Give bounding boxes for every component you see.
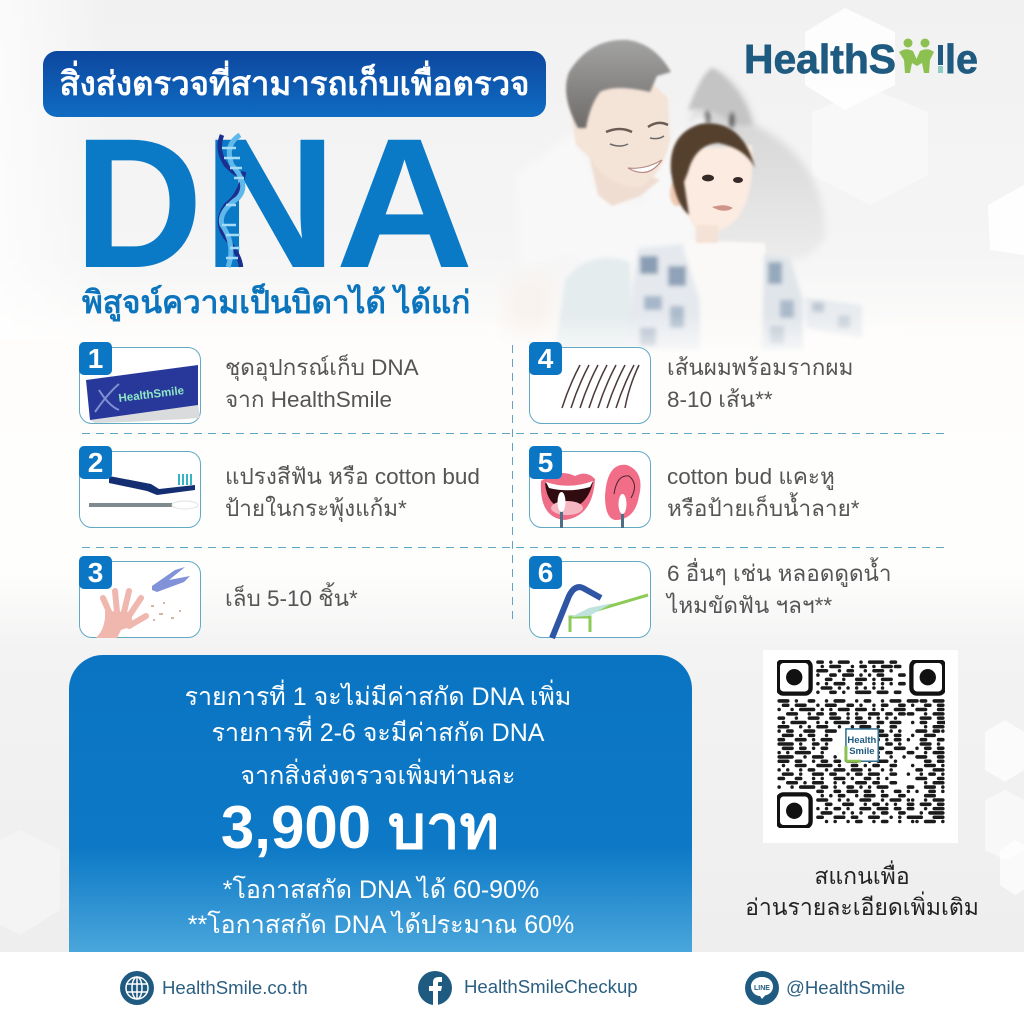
item 4 text: เส้นผมพร้อมรากผม — [667, 355, 853, 380]
item 5 text: cotton bud แคะหู — [667, 464, 835, 489]
icon: facebook — [418, 971, 452, 1005]
number badge 2: 2 — [88, 447, 103, 478]
child shirt — [675, 240, 775, 350]
item 2 text: ป้ายในกระพุ้งแก้ม* — [225, 496, 407, 521]
item 1 card — [79, 342, 201, 424]
qr centre logo: Smile — [849, 746, 874, 757]
number badge 4: 4 — [538, 343, 553, 374]
finder pattern bottom-left — [778, 794, 811, 827]
logo: le — [945, 36, 978, 82]
number badge 5 — [529, 446, 562, 479]
subtitle: พิสูจน์ความเป็นบิดาได้ ได้แก่ — [82, 284, 470, 320]
price: 3,900 บาท — [221, 794, 499, 861]
man face and neck — [572, 72, 670, 206]
icon: line — [745, 971, 779, 1005]
qr caption — [745, 860, 979, 920]
finder pattern top-left — [778, 661, 811, 694]
man hair — [566, 40, 671, 128]
item 2 text: แปรงสีฟัน หรือ cotton bud — [225, 464, 480, 489]
qr caption: อ่านรายละเอียดเพิ่มเติม — [745, 894, 979, 920]
item 1 text — [225, 354, 419, 412]
child hair — [671, 123, 755, 215]
qr code — [763, 650, 958, 843]
item 2 text — [225, 464, 480, 522]
item 4 text — [667, 355, 853, 412]
panel text line 3: จากสิ่งส่งตรวจเพิ่มท่านละ — [241, 762, 515, 790]
number badge 1 — [79, 342, 112, 375]
item 5 text: หรือป้ายเก็บน้ำลาย* — [667, 496, 860, 521]
number badge 1: 1 — [88, 343, 103, 374]
item 6 text — [666, 557, 892, 618]
qr caption: สแกนเพื่อ — [814, 863, 910, 889]
qr centre logo — [846, 729, 878, 761]
photo: father and child — [514, 38, 862, 348]
logo: HealthS — [744, 36, 896, 82]
icon: dna kit box: HealthSmile — [118, 385, 185, 405]
icon: hair strands — [561, 364, 640, 408]
big DNA heading — [74, 120, 474, 280]
icon: toothbrush and cotton bud — [89, 474, 198, 510]
item 6 text: 6 อื่นๆ เช่น หลอดดูดน้ำ — [667, 561, 892, 586]
dashed dividers — [82, 345, 944, 619]
item 3 text: เล็บ 5-10 ชิ้น* — [225, 586, 358, 611]
item 6 text: ไหมขัดฟัน ฯลฯ** — [667, 593, 832, 618]
number badge 6: 6 — [538, 557, 553, 588]
footer line id: @HealthSmile — [786, 977, 905, 998]
number badge 4 — [529, 342, 562, 375]
item 6 card — [529, 556, 651, 640]
item 5 text — [667, 464, 860, 521]
icon: dna helix — [220, 135, 244, 267]
number badge 6 — [529, 556, 562, 589]
footer facebook: HealthSmileCheckup — [464, 976, 638, 997]
item 1 text: ชุดอุปกรณ์เก็บ DNA — [225, 355, 419, 380]
icon: globe — [120, 971, 154, 1005]
icon: logo figures — [899, 38, 934, 73]
man shirt — [515, 110, 715, 290]
item 3 card — [79, 556, 201, 638]
plaid sleeves — [624, 244, 862, 350]
finder pattern top-right — [911, 661, 944, 694]
number badge 2 — [79, 446, 112, 479]
number badge 3: 3 — [88, 557, 103, 588]
footnotes: **โอกาสสกัด DNA ได้ประมาณ 60% — [188, 911, 574, 939]
item 2 card — [79, 446, 201, 528]
item 1 text: จาก HealthSmile — [225, 387, 392, 412]
item 4 card — [529, 342, 651, 424]
footer bar — [0, 952, 1024, 1024]
man arm — [508, 278, 555, 340]
beanbag — [690, 70, 825, 263]
child face — [670, 145, 752, 243]
panel text lines: รายการที่ 2-6 จะมีค่าสกัด DNA — [212, 719, 544, 747]
knee — [555, 258, 634, 350]
footer website: HealthSmile.co.th — [162, 977, 308, 998]
icon: straw and dental floss pick — [549, 584, 648, 640]
title pill: สิ่งส่งตรวจที่สามารถเก็บเพื่อตรวจ — [59, 65, 530, 102]
panel text lines — [185, 680, 571, 747]
title pill — [43, 51, 546, 117]
item 5 card — [529, 446, 651, 528]
logo — [744, 36, 978, 82]
panel text lines: รายการที่ 1 จะไม่มีค่าสกัด DNA เพิ่ม — [185, 683, 571, 711]
panel: price info — [69, 655, 692, 952]
qr centre logo: Health — [847, 735, 877, 746]
number badge 5: 5 — [538, 447, 553, 478]
footnotes: *โอกาสสกัด DNA ได้ 60-90% — [223, 876, 539, 904]
number badge 3 — [79, 556, 112, 589]
icon: mouth and ear swabs — [540, 464, 640, 528]
item 4 text: 8-10 เส้น** — [667, 387, 773, 412]
icon: line: LINE — [754, 985, 770, 992]
footnotes — [188, 876, 574, 939]
icon: hand and nail clipper — [96, 567, 190, 638]
icon: dna kit box — [86, 365, 200, 423]
